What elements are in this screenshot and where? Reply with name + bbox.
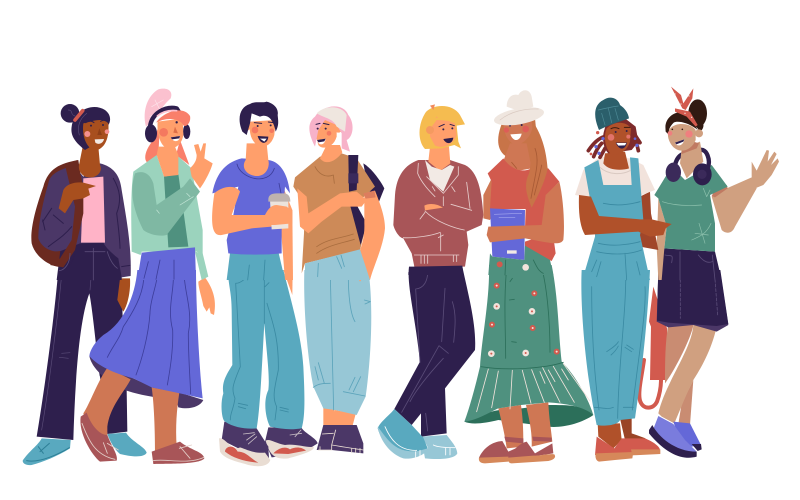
waving hand (752, 150, 779, 188)
hair back (61, 104, 79, 123)
neck (603, 152, 629, 170)
far arm (281, 190, 293, 280)
hair (309, 106, 353, 152)
hand on cup (265, 205, 292, 225)
tee (654, 165, 728, 252)
peace hand (190, 143, 213, 188)
light jeans (304, 270, 371, 415)
crossed hand (424, 204, 443, 210)
back shoe (421, 435, 457, 459)
bandana (675, 108, 698, 127)
hat (493, 104, 545, 129)
shirt (293, 153, 375, 273)
person 4: person with pink and white hair (293, 106, 385, 453)
arm (579, 195, 672, 237)
collar (425, 160, 454, 192)
pants detail (59, 248, 117, 280)
head (315, 117, 337, 148)
jacket (38, 163, 131, 277)
flowers (488, 263, 560, 357)
far arm lower (283, 270, 293, 295)
top (488, 158, 559, 261)
legs (83, 368, 131, 437)
hair (688, 99, 707, 127)
shoes (80, 413, 117, 462)
person 2: woman with pink hat, headphones and blue skirt (80, 89, 215, 464)
overalls legs (581, 270, 650, 426)
person 1: woman with bun and backpack (23, 104, 147, 465)
beanie (595, 98, 629, 130)
headphones cups (666, 163, 681, 182)
headphones (150, 108, 185, 127)
shoes (265, 427, 318, 457)
red shoes (595, 437, 660, 455)
curly hair (588, 118, 640, 157)
backpack (31, 160, 83, 267)
overalls top (582, 157, 650, 280)
dark trousers (394, 267, 475, 437)
waistband (408, 266, 463, 275)
sweater (393, 160, 483, 267)
folded forearm (297, 188, 367, 233)
face (157, 118, 183, 148)
pointing hand (59, 182, 96, 213)
skirt top (488, 246, 553, 275)
far arm (483, 178, 494, 220)
arm over backpack (352, 191, 385, 280)
jeans top (227, 252, 285, 280)
neck (157, 147, 178, 177)
sandals (479, 441, 523, 462)
backpack strap (50, 160, 83, 267)
person 7: woman in beanie and blue overalls (575, 98, 672, 462)
neck (503, 143, 532, 171)
sleeve (132, 172, 200, 236)
face (503, 112, 532, 145)
person 6: woman in hat with green floral skirt (464, 90, 593, 463)
back arm (635, 192, 658, 250)
skirt (657, 270, 728, 332)
skirt underside (89, 356, 203, 408)
shoes (317, 425, 363, 453)
person 8: woman with bandana and headphones waving (639, 87, 779, 458)
shoes (673, 422, 701, 447)
neck (680, 142, 703, 178)
hat (145, 89, 171, 127)
head (243, 123, 251, 131)
legs (498, 402, 552, 448)
headphone band (675, 150, 709, 168)
near arm (657, 198, 667, 280)
hair beads (594, 137, 639, 155)
hair fringe (156, 110, 190, 126)
skirt (464, 265, 593, 422)
book (490, 208, 525, 260)
tee (575, 157, 655, 197)
arm and hand (487, 182, 564, 243)
sweater lines (403, 163, 472, 263)
light jeans top (305, 249, 370, 280)
person 3: man with coffee cup (212, 102, 318, 466)
neck (244, 143, 269, 176)
teal shirt (164, 174, 188, 247)
pink shirt (81, 177, 105, 243)
tee (212, 158, 290, 255)
neck (79, 143, 101, 177)
skirt top (137, 247, 196, 280)
face (695, 129, 703, 137)
arm (212, 187, 292, 235)
hair strand over top (526, 125, 548, 208)
face (430, 117, 457, 147)
jeans (222, 270, 304, 429)
hand (198, 277, 215, 315)
front shoe (378, 409, 428, 457)
hair back (145, 123, 189, 165)
face (605, 123, 631, 154)
ankles (620, 418, 646, 440)
red backpack (649, 287, 667, 380)
neck (320, 145, 342, 162)
skirt top (662, 248, 722, 280)
neck (428, 147, 450, 171)
person 5: blond man with arms crossed (378, 104, 483, 459)
skirt (89, 270, 203, 398)
face (83, 120, 109, 151)
backpack (363, 163, 384, 203)
legs (323, 403, 356, 427)
raised arm (712, 177, 757, 233)
strap (348, 155, 367, 245)
ruffle underside (464, 405, 593, 427)
hair (498, 118, 538, 168)
cup (270, 200, 288, 229)
legs (665, 323, 693, 383)
jacket (131, 155, 203, 255)
hair back (419, 106, 465, 149)
